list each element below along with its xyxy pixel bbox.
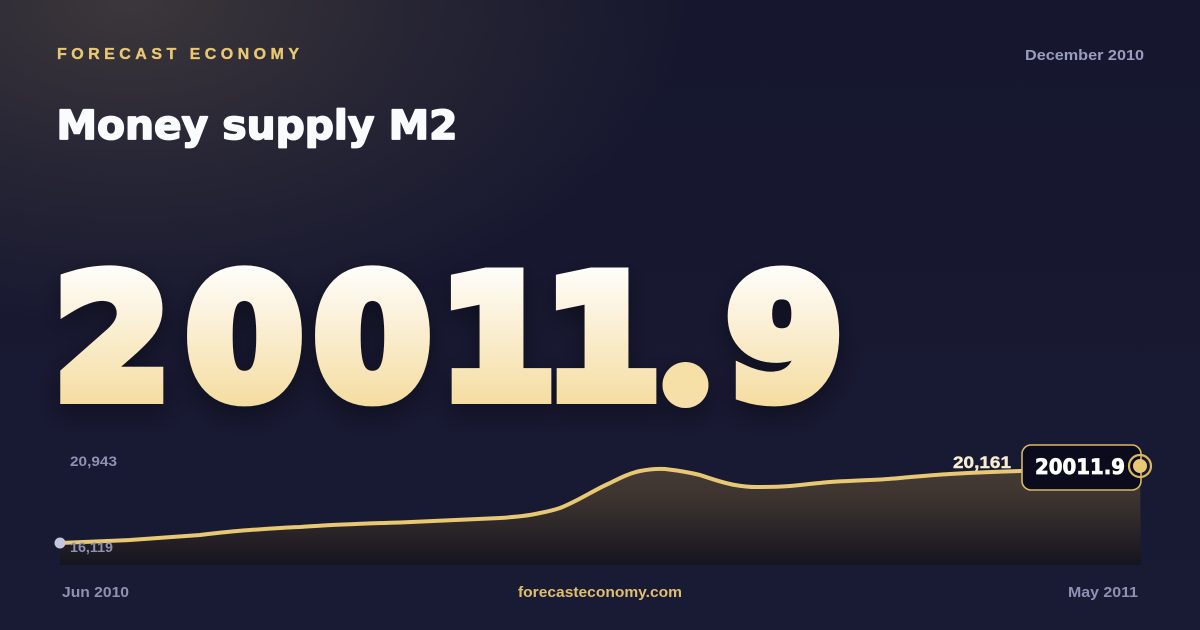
start dot — [54, 538, 66, 548]
big value: . — [672, 337, 695, 407]
axis max label: 20,943 — [70, 453, 117, 469]
area chart — [60, 466, 1141, 565]
chart line — [60, 466, 1140, 543]
prior value label: 20,161 — [953, 453, 1011, 472]
big value: 9 — [726, 241, 843, 437]
date: December 2010 — [1025, 47, 1144, 64]
source link: forecasteconomy.com — [518, 584, 682, 601]
chart area fill — [60, 466, 1141, 565]
big value: 20011 — [54, 241, 661, 437]
axis min label: 16,119 — [70, 539, 113, 555]
decimal point — [662, 362, 708, 408]
value badge — [1022, 445, 1141, 490]
title: Money supply M2 — [56, 103, 458, 149]
end marker — [1129, 455, 1151, 477]
start date label: Jun 2010 — [62, 584, 129, 601]
value badge: 20011.9 — [1035, 455, 1125, 479]
end date label: May 2011 — [1068, 584, 1138, 601]
brand label: FORECAST ECONOMY — [57, 46, 299, 63]
